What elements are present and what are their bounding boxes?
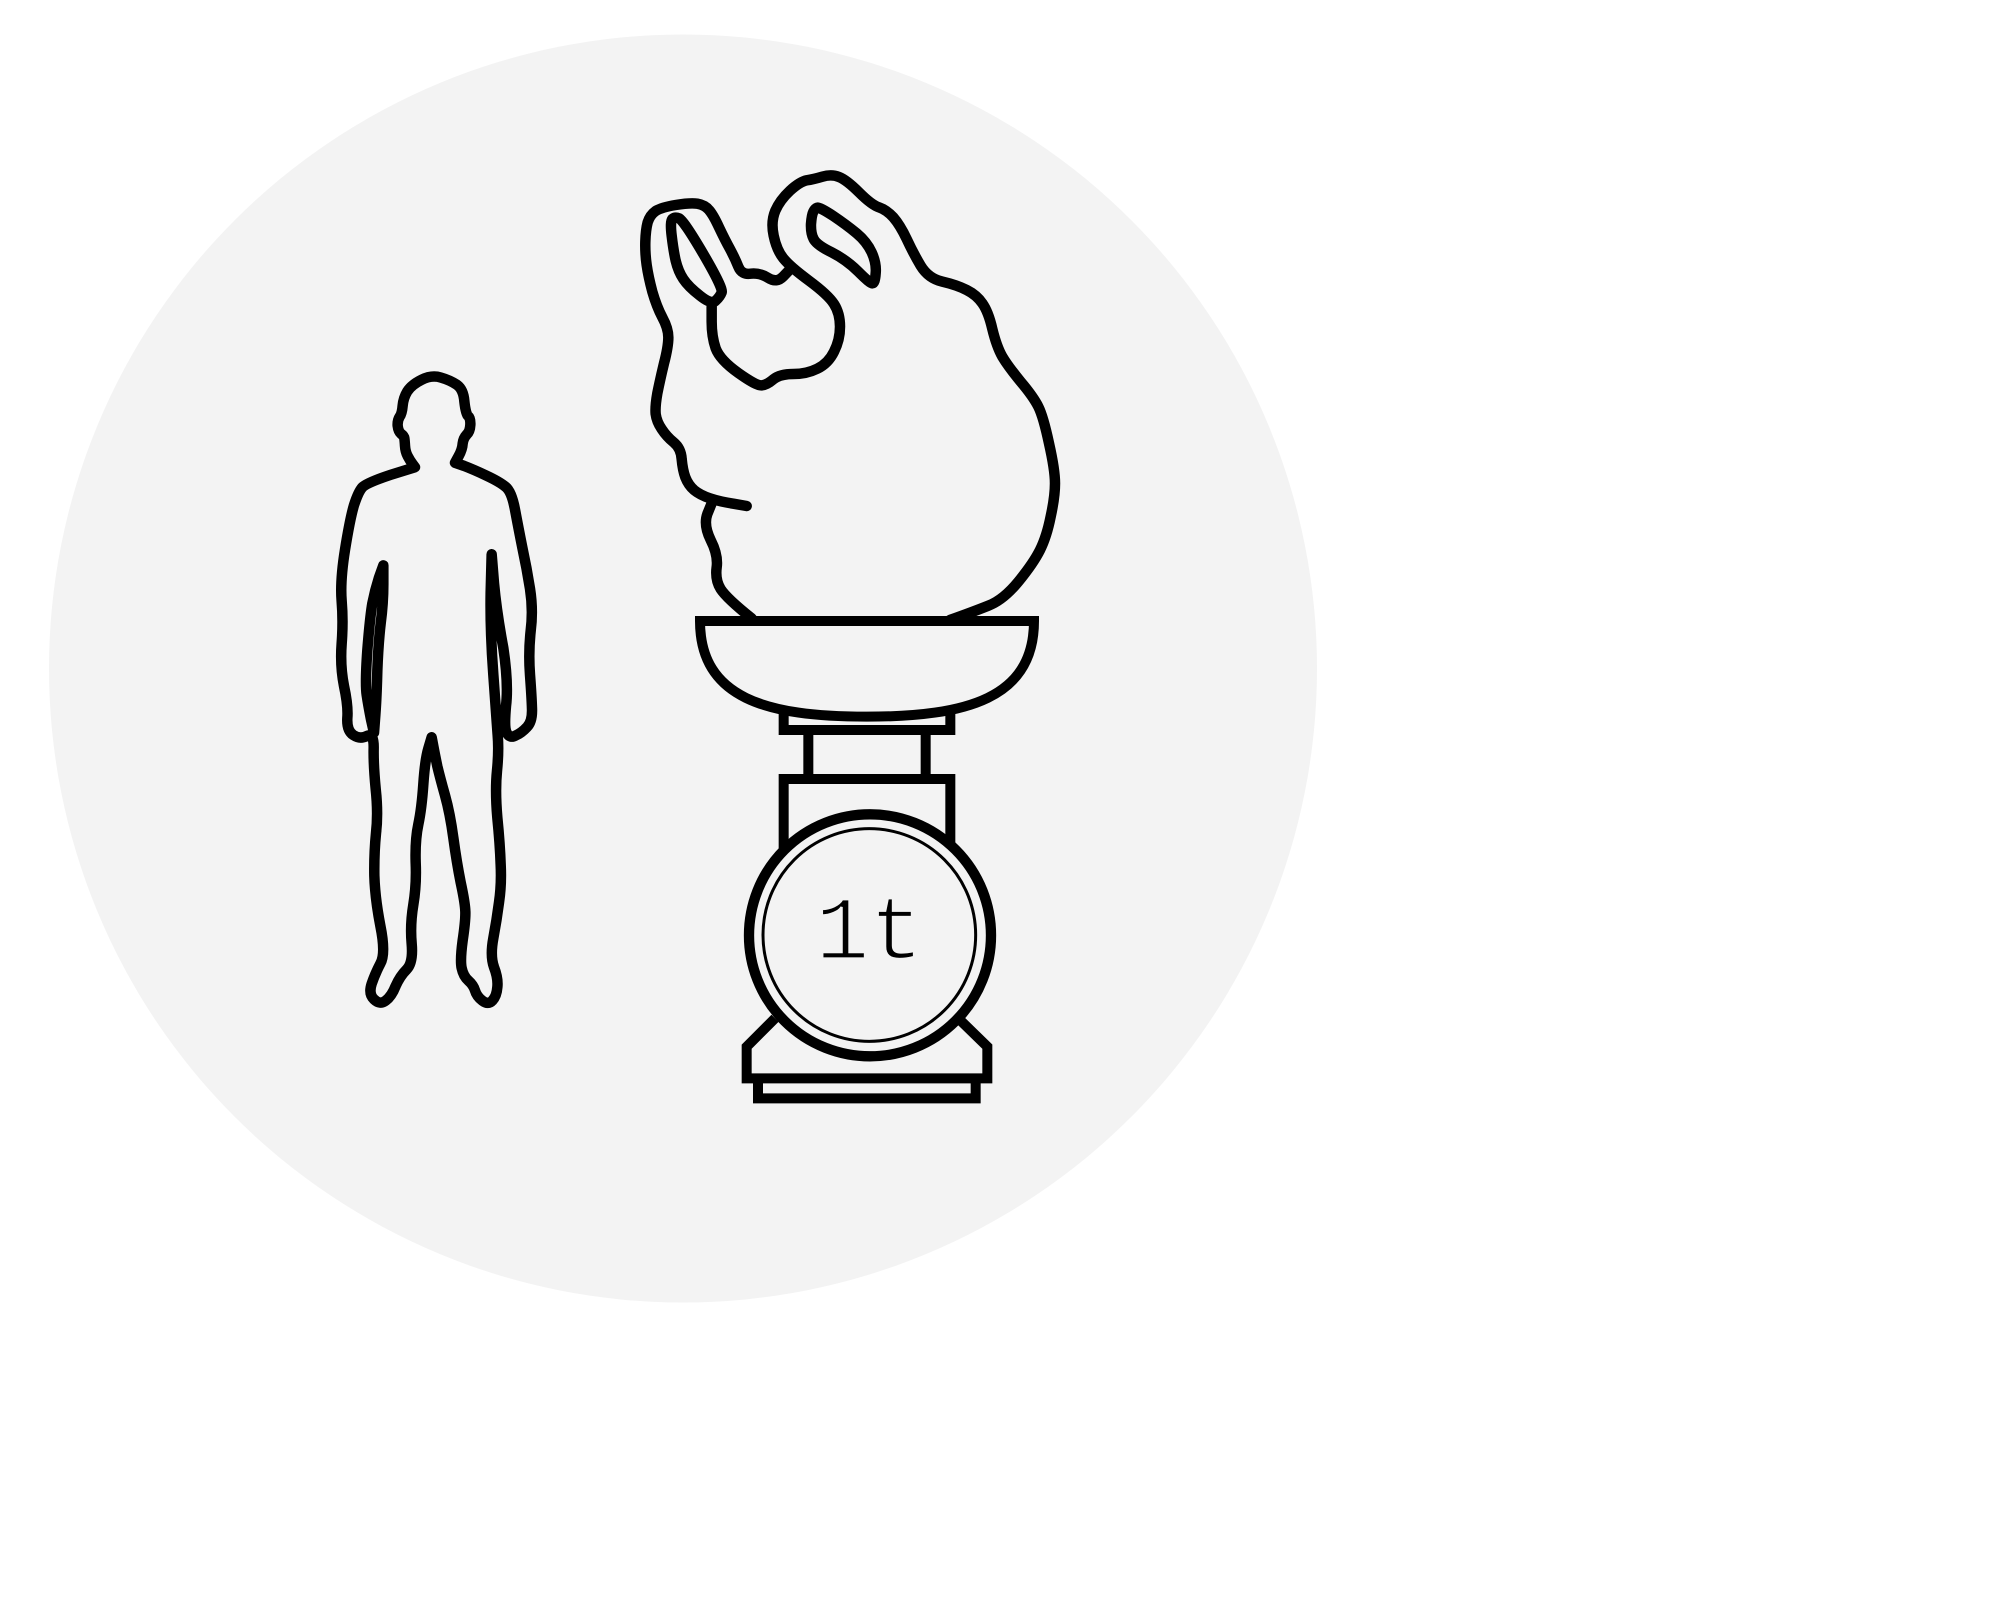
scale base (747, 1018, 987, 1098)
icon: plastic bag (645, 175, 1055, 620)
scale neck (784, 708, 950, 779)
scale body (784, 779, 950, 848)
icon: human silhouette (341, 377, 532, 1003)
scale pan (700, 621, 1034, 717)
background circle (49, 34, 1317, 1302)
dial label: 1t (815, 884, 923, 986)
icon: weighing scale (700, 621, 1034, 1098)
scale dial (749, 814, 991, 1056)
